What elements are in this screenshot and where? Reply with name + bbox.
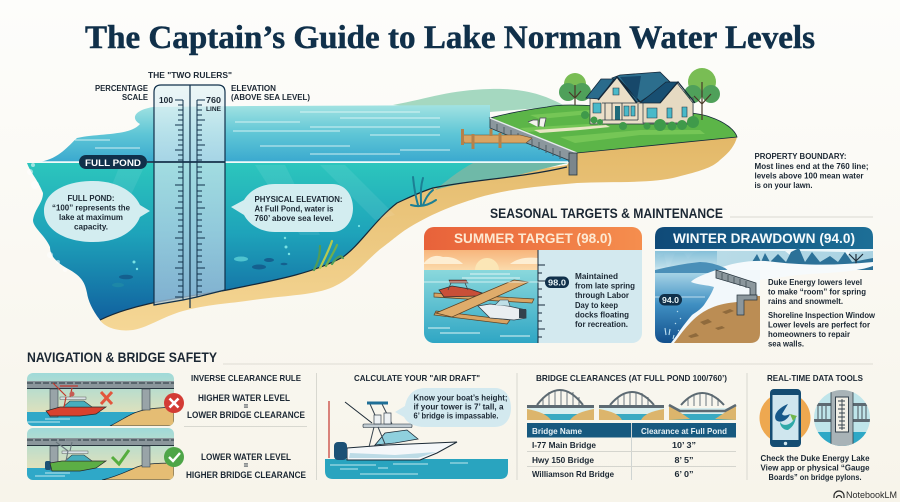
label: elevation: (ABOVE SEA LEVEL) [231,93,310,102]
callout: physical elevation: 760’ above sea level. [254,214,334,223]
icon: green check badge [164,447,184,467]
water line [655,296,705,298]
callout: full pond: capacity. [74,222,108,232]
panel: real-time data tools [760,373,870,482]
boat seats [374,413,391,424]
heading: seasonal targets: SEASONAL TARGETS & MAINTENANCE [490,206,723,221]
shallow water over sand [435,163,567,190]
icon: sea grass lower [314,241,343,270]
data tools note: View app or physical “Gauge [760,462,870,472]
house center gable [600,78,635,110]
callout: full pond [44,181,150,242]
shrubs [581,111,699,131]
summer red boat [439,280,482,297]
winter description: rains and snowmelt. [768,297,843,306]
label: percentage scale: SCALE [122,93,149,102]
property boundary note: PROPERTY BOUNDARY: [754,152,846,161]
summer level tag: 98.0 [548,278,567,288]
icon: sea grass upper [411,177,436,206]
panel: low water bridge scene [27,428,184,480]
bare tree [849,254,863,270]
icon: fish and bubbles [112,225,360,287]
summer description: Day to keep [575,301,618,310]
x mark [101,392,112,404]
house walls [590,98,693,124]
water above full pond [40,105,570,162]
house back roof [612,72,670,102]
inverse clearance rule: INVERSE CLEARANCE RULE [191,373,301,383]
windows [593,88,687,118]
ruler center post [189,85,191,308]
inverse clearance rule: = [244,402,249,411]
icicles along top [655,249,873,271]
full pond level line [147,161,225,163]
clearance table: Bridge Name [532,426,582,436]
winter description: Lower levels are perfect for [768,320,870,330]
winter description: to make “room” for spring [768,288,866,296]
callout: physical elevation: At Full Pond, water is [254,204,334,214]
panel: air draft [325,373,511,479]
boat hull [347,442,457,460]
callout: full pond: FULL POND: [68,194,114,203]
summer title: SUMMER TARGET (98.0) [454,230,612,246]
winter description: Duke Energy lowers level [768,278,862,287]
dark valley roof [620,76,641,100]
winter sky [655,251,717,270]
property: lawn [490,105,737,153]
door [615,106,620,120]
icon: red x badge [164,393,184,413]
panel: high water bridge scene [27,373,184,426]
dirt speckles [688,309,734,338]
winter wall post [737,295,757,315]
property boundary note: is on your lawn. [754,181,812,190]
winter title: WINTER DRAWDOWN (94.0) [673,230,855,246]
data tools note: Check the Duke Energy Lake [760,453,870,463]
summer white boat [478,300,526,320]
full pond pill: FULL POND [85,158,141,169]
summer description: Maintained [575,272,618,281]
winter level tag: 94.0 [662,296,680,305]
boat cabin [375,430,418,445]
green boat [45,440,106,471]
label: elevation: ELEVATION [231,84,276,93]
tree left [559,73,591,105]
air draft heading: CALCULATE YOUR "AIR DRAFT" [354,373,480,383]
inverse clearance rule: = [244,461,249,470]
patio chairs [528,118,546,127]
light rays [90,165,395,240]
summer lower horizontal dock [434,311,510,324]
winter description [768,278,876,348]
winter sky band [655,249,873,267]
summer sky [424,250,538,271]
winter description: homeowners to repair [768,330,850,339]
winter treeline [752,248,873,270]
label: percentage scale [95,84,149,102]
summer description: through Labor [575,291,629,300]
full pond pill [79,155,147,169]
check mark [112,450,129,464]
air draft bubble: 6’ bridge is impassable. [414,412,498,420]
callout: physical elevation [231,184,353,232]
icon: gauge board [814,388,870,448]
inverse clearance rule: LOWER WATER LEVEL [201,452,291,462]
summer horizon ripples [428,274,530,336]
clearance table: Williamson Rd Bridge [532,469,614,479]
title: The Captain’s Guide to Lake Norman Water Levels [85,20,815,56]
inverse clearance rule: HIGHER BRIDGE CLEARANCE [186,470,306,480]
inverse clearance rule: HIGHER WATER LEVEL [198,393,290,403]
left tick marks [175,100,183,300]
sand shoreline [100,137,737,330]
notebooklm mark: NotebookLM [846,490,897,500]
tree right [684,68,720,120]
data tools note [760,453,870,482]
winter exposed lake bed [674,296,760,343]
ruler value 100: 100 [159,95,173,105]
full pond line [40,161,568,163]
clearance table: I-77 Main Bridge [532,440,596,450]
summer description: docks floating [575,310,629,320]
label: percentage scale: PERCENTAGE [95,84,149,93]
data tools note: Boards” on bridge pylons. [768,472,862,482]
snow bank [716,261,873,280]
house [559,68,720,131]
winter bubbles [665,311,681,339]
panel: bridge clearances [527,373,736,480]
surface ripples [75,112,450,154]
boat tower [369,404,392,447]
summer ruler [538,250,546,343]
sea wall [490,118,577,175]
label: the two rulers: THE "TWO RULERS" [148,71,232,80]
lawn stripes [520,110,705,143]
clearance table: 10’ 3” [672,440,696,450]
callout: physical elevation: PHYSICAL ELEVATION: [254,195,342,204]
air draft bubble: Know your boat’s height; [414,394,508,402]
heading: navigation and bridge safety: NAVIGATION & BRIDGE SAFETY [27,350,217,365]
summer sun [475,258,499,270]
summer water [424,270,538,343]
boat hardtop [363,424,412,428]
house left roof [586,79,614,99]
ruler frame [154,85,225,305]
winter level tag [659,294,682,306]
summer description [575,272,635,329]
water line [424,282,545,283]
porch [602,103,638,120]
summer level tag [545,276,569,288]
property boundary note: levels above 100 mean water [754,172,864,180]
winter snowy shore [671,270,760,343]
summer clouds [424,256,538,264]
clearance table: 8’ 5” [674,455,694,465]
bridge icons [527,390,736,420]
eroded spray texture [27,163,67,272]
bridge clearances heading: BRIDGE CLEARANCES (AT FULL POND 100/760’) [536,373,727,383]
panel: winter drawdown [655,227,876,348]
winter hill [655,262,728,273]
shore outline [100,167,567,320]
water below full pond [27,163,568,320]
winter sea wall [716,270,756,295]
summer upper horizontal dock [434,293,534,303]
ruler value 760 line [206,95,222,113]
property boundary note: Most lines end at the 760 line; [754,162,868,171]
background hill [393,89,565,112]
ruler value 760 line: 760 [206,95,221,105]
winter header [655,227,873,250]
boat engine [334,442,347,460]
summer diagonal dock [436,280,529,317]
lake cross-section diagram [27,68,737,330]
air draft water [325,459,508,479]
property boundary note [754,152,868,190]
air draft bubble [395,388,511,427]
clearance table: 6’ 0” [674,469,694,479]
air draft bubble: if your tower is 7’ tall, a [414,402,504,412]
clearance table: Clearance at Full Pond [641,426,727,436]
clearance table: Hwy 150 Bridge [532,455,594,465]
winter description: sea walls. [768,340,804,348]
red boat [46,383,106,416]
boat antenna [345,402,372,423]
summer description: from late spring [575,282,635,290]
icon: phone app [760,389,810,447]
ruler value 760 line: LINE [206,106,222,113]
panel: summer target [424,227,642,343]
house right gable [643,83,693,123]
callout: full pond: “100” represents the [52,204,131,212]
dock [462,129,532,149]
right tick marks [197,100,205,297]
height marker [328,401,330,458]
summer right pane [424,227,642,343]
summer description: for recreation. [575,320,628,329]
inverse clearance rule [184,373,307,480]
winter description: Shoreline Inspection Window [768,311,876,320]
inverse clearance rule: LOWER BRIDGE CLEARANCE [187,410,305,420]
boat icon [334,402,457,460]
clearance table [527,423,736,480]
label: elevation [231,84,310,102]
callout: full pond: lake at maximum [59,213,123,222]
house right roof [640,82,678,103]
summer header [424,227,642,250]
winter water [655,273,714,343]
data tools heading: REAL-TIME DATA TOOLS [767,373,863,383]
lawn path [534,125,610,133]
two rulers gauge [147,85,225,308]
